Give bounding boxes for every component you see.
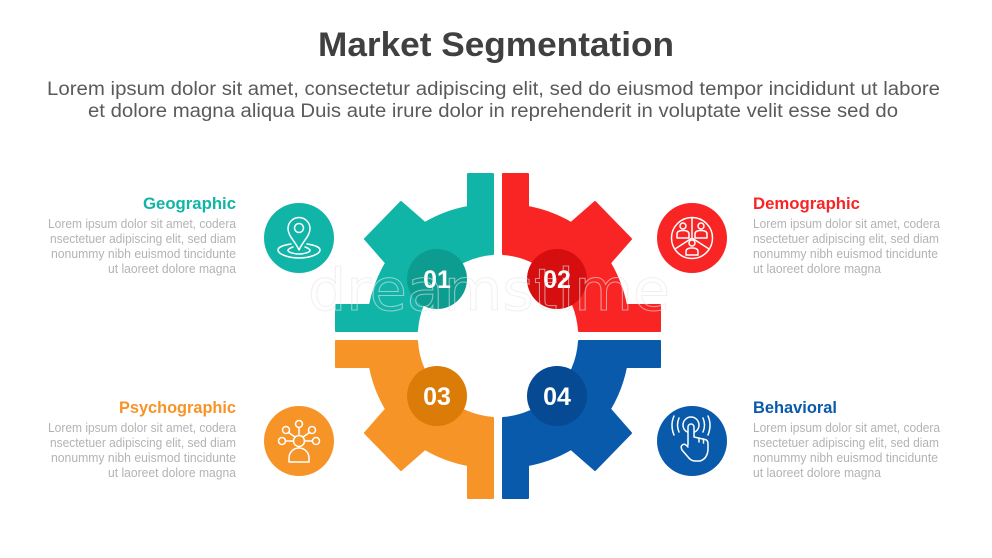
text block: Behavioral bbox=[753, 399, 940, 480]
text block: Geographic: Lorem ipsum dolor sit amet, codera bbox=[48, 217, 236, 231]
text block: Psychographic: Lorem ipsum dolor sit amet, codera bbox=[48, 421, 236, 435]
text block: Demographic: Demographic bbox=[753, 195, 860, 213]
number badge 02 bbox=[527, 249, 587, 309]
gear segment 04 blue bbox=[503, 341, 660, 498]
text block: Psychographic: nsectetuer adipiscing elit, sed diam bbox=[50, 436, 236, 450]
icon: location pin bbox=[264, 203, 334, 273]
number badge 04 bbox=[527, 366, 587, 426]
gear segment 03 orange bbox=[336, 341, 493, 498]
text block: Behavioral: ut laoreet dolore magna bbox=[753, 466, 881, 480]
icon: touch gesture bbox=[657, 406, 727, 476]
intro paragraph: Lorem ipsum dolor sit amet, consectetur adipiscing elit, sed do eiusmod tempor incididunt ut labore bbox=[47, 79, 940, 100]
text block: Geographic bbox=[48, 195, 236, 276]
text block: Demographic: nsectetuer adipiscing elit, sed diam bbox=[753, 232, 939, 246]
text block: Geographic: Geographic bbox=[143, 195, 236, 213]
text block: Geographic: nonummy nibh euismod tincidunte bbox=[51, 247, 236, 261]
text block: Psychographic: nonummy nibh euismod tincidunte bbox=[51, 451, 236, 465]
text block: Geographic: nsectetuer adipiscing elit, sed diam bbox=[50, 232, 236, 246]
intro paragraph: et dolore magna aliqua Duis aute irure dolor in reprehenderit in voluptate velit esse sed do bbox=[88, 101, 898, 122]
watermark: dreamstime bbox=[308, 256, 670, 324]
number badge 02: 02 bbox=[543, 266, 571, 294]
text block: Psychographic bbox=[48, 399, 236, 480]
text block: Psychographic: Psychographic bbox=[119, 399, 236, 417]
icon: psychographic network bbox=[264, 406, 334, 476]
text block: Geographic: ut laoreet dolore magna bbox=[108, 262, 236, 276]
text block: Demographic: Lorem ipsum dolor sit amet, codera bbox=[753, 217, 940, 231]
icon: demographic groups bbox=[657, 203, 727, 273]
text block: Behavioral: nonummy nibh euismod tincidunte bbox=[753, 451, 938, 465]
number badge 01 bbox=[407, 249, 467, 309]
intro paragraph bbox=[47, 79, 940, 122]
number badge 01: 01 bbox=[423, 266, 451, 294]
number badge 03 bbox=[407, 366, 467, 426]
text block: Demographic: nonummy nibh euismod tincidunte bbox=[753, 247, 938, 261]
text block: Behavioral: Behavioral bbox=[753, 399, 837, 417]
number badge 04: 04 bbox=[543, 383, 571, 411]
text block: Behavioral: nsectetuer adipiscing elit, sed diam bbox=[753, 436, 939, 450]
gear segment 02 red bbox=[503, 174, 660, 331]
title: Market Segmentation bbox=[318, 26, 674, 64]
text block: Demographic: ut laoreet dolore magna bbox=[753, 262, 881, 276]
text block: Behavioral: Lorem ipsum dolor sit amet, codera bbox=[753, 421, 940, 435]
gear segment 01 teal bbox=[336, 174, 493, 331]
text block: Psychographic: ut laoreet dolore magna bbox=[108, 466, 236, 480]
text block: Demographic bbox=[753, 195, 940, 276]
number badge 03: 03 bbox=[423, 383, 451, 411]
